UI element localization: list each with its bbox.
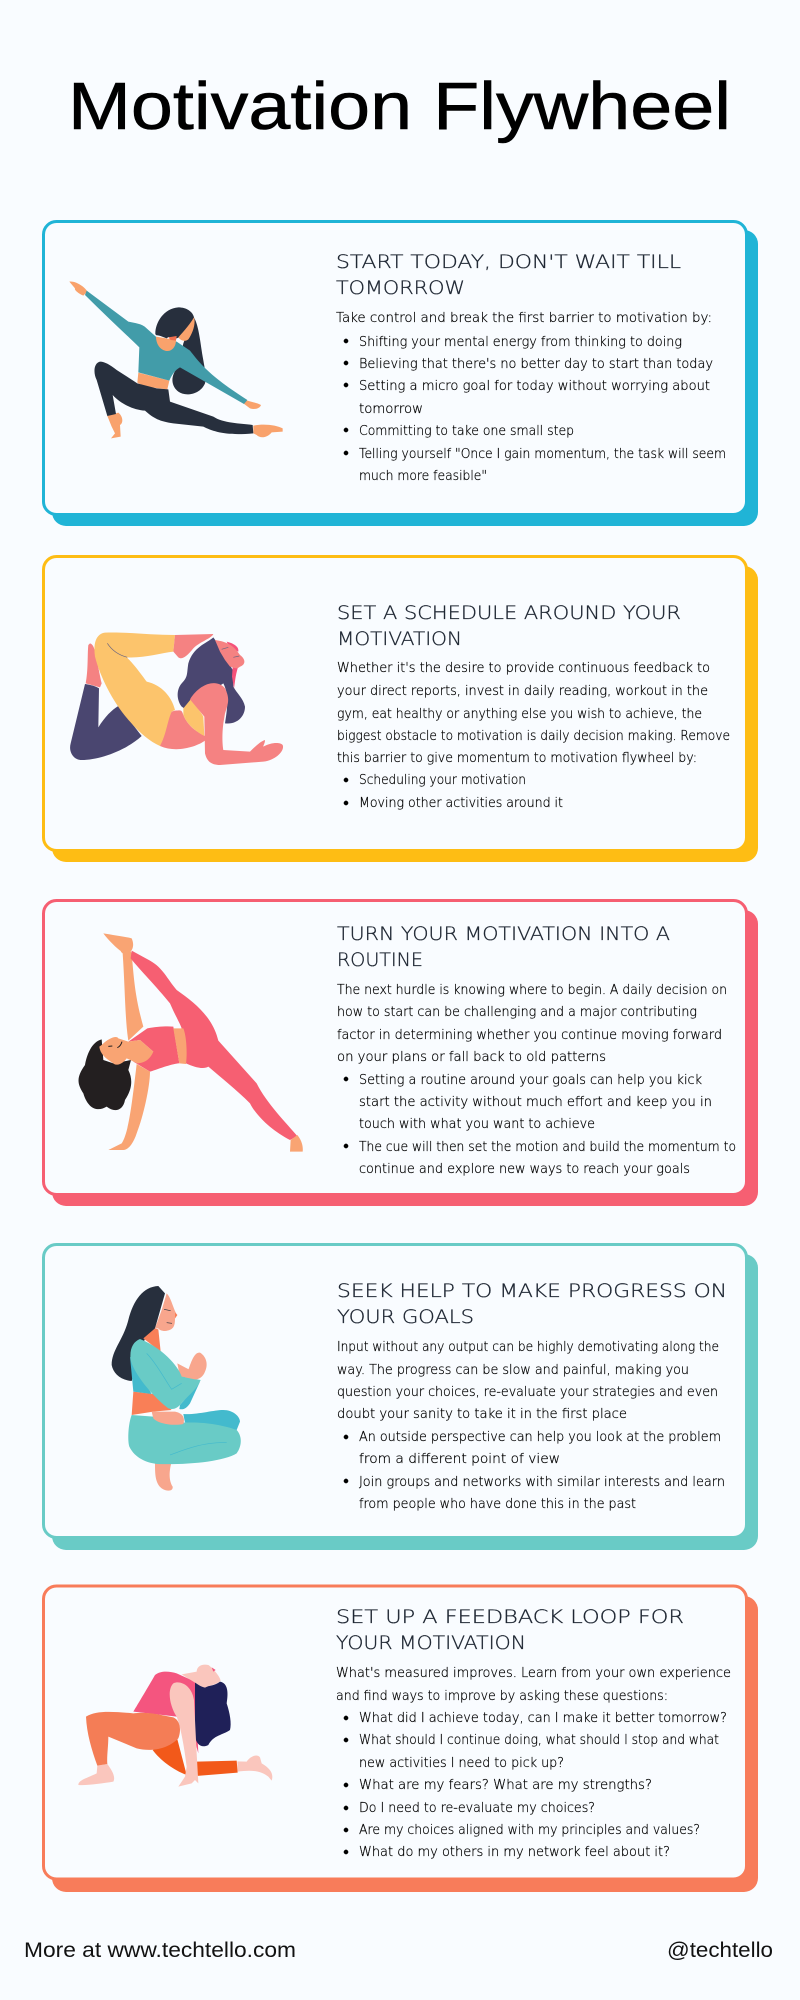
text block: intro and bullets: Shifting your mental energy from thinking to doing <box>359 335 682 350</box>
text block: intro and bullets: touch with what you want to achieve <box>359 1117 595 1132</box>
text block: intro and bullets: doubt your sanity to take it in the first place <box>337 1407 627 1422</box>
text block: intro and bullets: Committing to take one small step <box>359 424 574 439</box>
heading: START TODAY, DON'T WAIT TILL <box>336 252 681 273</box>
heading <box>337 1281 727 1328</box>
illustration: side plank woman in coral <box>79 933 303 1152</box>
text block: intro and bullets: from people who have done this in the past <box>359 1497 636 1512</box>
text block: intro and bullets: Input without any output can be highly demotivating along the <box>337 1340 719 1355</box>
text block: intro and bullets: The cue will then set the motion and build the momentum to <box>359 1140 736 1155</box>
text block: intro and bullets: The next hurdle is knowing where to begin. A daily decision on <box>337 983 727 998</box>
text block: intro and bullets: start the activity without much effort and keep you in <box>359 1095 712 1110</box>
text block: intro and bullets: Setting a routine around your goals can help you kick <box>359 1073 702 1088</box>
text block: intro and bullets: on your plans or fall back to old patterns <box>337 1050 606 1065</box>
panel: set a schedule <box>44 556 758 862</box>
heading <box>336 1607 684 1654</box>
heading <box>336 252 681 299</box>
heading: YOUR MOTIVATION <box>336 1633 526 1654</box>
text block: intro and bullets: continue and explore new ways to reach your goals <box>359 1162 690 1177</box>
heading: TURN YOUR MOTIVATION INTO A <box>337 924 670 945</box>
text block: intro and bullets: What are my fears? What are my strengths? <box>359 1778 652 1793</box>
text block: intro and bullets: gym, eat healthy or anything else you wish to achieve, the <box>337 707 702 722</box>
heading: YOUR GOALS <box>337 1307 474 1328</box>
heading <box>337 603 681 650</box>
heading: TOMORROW <box>336 278 465 299</box>
panel: seek help <box>44 1244 758 1550</box>
text block: intro and bullets: What do my others in my network feel about it? <box>359 1845 670 1860</box>
text block: intro and bullets: this barrier to give momentum to motivation flywheel by: <box>337 751 697 766</box>
text block: intro and bullets: Do I need to re-evaluate my choices? <box>359 1801 595 1816</box>
text block: intro and bullets: new activities I need to pick up? <box>359 1756 564 1771</box>
card frame: teal <box>44 1244 758 1550</box>
text block: intro and bullets: Are my choices aligned with my principles and values? <box>359 1823 700 1838</box>
footer right: handle: @techtello <box>667 1939 773 1962</box>
text block: intro and bullets: and find ways to improve by asking these questions: <box>336 1689 668 1704</box>
text block: intro and bullets: how to start can be challenging and a major contributing <box>337 1005 697 1020</box>
text block: intro and bullets: biggest obstacle to motivation is daily decision making. Remove <box>337 729 730 744</box>
text block: intro and bullets: much more feasible" <box>359 469 487 484</box>
text block: intro and bullets <box>337 1340 725 1512</box>
text block: intro and bullets: An outside perspective can help you look at the problem <box>359 1430 721 1445</box>
text block: intro and bullets <box>337 661 730 811</box>
text block: intro and bullets: What did I achieve today, can I make it better tomorrow? <box>359 1711 727 1726</box>
text block: intro and bullets: your direct reports, invest in daily reading, workout in the <box>337 684 708 699</box>
text block: intro and bullets: What's measured improves. Learn from your own experience <box>336 1666 731 1681</box>
heading: ROUTINE <box>337 950 423 971</box>
text block: intro and bullets <box>336 311 726 484</box>
text block: intro and bullets: tomorrow <box>359 402 423 417</box>
text block: intro and bullets: Take control and break the first barrier to motivation by: <box>336 311 712 326</box>
panel: feedback loop <box>44 1586 758 1892</box>
heading: MOTIVATION <box>337 629 462 650</box>
illustration: seated meditating woman <box>112 1286 241 1491</box>
heading: SET A SCHEDULE AROUND YOUR <box>337 603 681 624</box>
text block: intro and bullets: Scheduling your motivation <box>359 773 526 788</box>
text block: intro and bullets <box>337 983 736 1177</box>
panel: start today <box>44 222 758 526</box>
text block: intro and bullets: way. The progress can be slow and painful, making you <box>337 1363 689 1378</box>
text block: intro and bullets: from a different point of view <box>359 1452 560 1467</box>
text block: intro and bullets <box>336 1666 731 1860</box>
text block: intro and bullets: Moving other activities around it <box>359 796 563 811</box>
text block: intro and bullets: Telling yourself "Once I gain momentum, the task will seem <box>359 447 726 462</box>
text block: intro and bullets: question your choices, re-evaluate your strategies and even <box>337 1385 718 1400</box>
card frame: yellow <box>44 556 758 862</box>
text block: intro and bullets: Whether it's the desire to provide continuous feedback to <box>337 661 710 676</box>
illustration: low lunge backbend woman <box>78 1665 272 1787</box>
text block: intro and bullets: Believing that there's no better day to start than today <box>359 357 713 372</box>
title: Motivation Flywheel <box>68 69 731 144</box>
text block: intro and bullets: Setting a micro goal for today without worrying about <box>359 379 710 394</box>
text block: intro and bullets: What should I continue doing, what should I stop and what <box>359 1733 719 1748</box>
illustration: stretching woman in teal top <box>69 282 283 438</box>
panel: turn motivation into routine <box>44 900 758 1206</box>
text block: intro and bullets: Join groups and networks with similar interests and learn <box>359 1475 725 1490</box>
heading <box>337 924 670 971</box>
card frame: coral <box>44 900 758 1206</box>
text block: intro and bullets: factor in determining whether you continue moving forward <box>337 1028 722 1043</box>
footer left: website: More at www.techtello.com <box>24 1939 296 1962</box>
heading: SEEK HELP TO MAKE PROGRESS ON <box>337 1281 727 1302</box>
heading: SET UP A FEEDBACK LOOP FOR <box>336 1607 684 1628</box>
card frame: blue <box>44 222 758 526</box>
card frame: orange <box>44 1586 758 1892</box>
illustration: twisting woman in yellow <box>70 632 283 765</box>
